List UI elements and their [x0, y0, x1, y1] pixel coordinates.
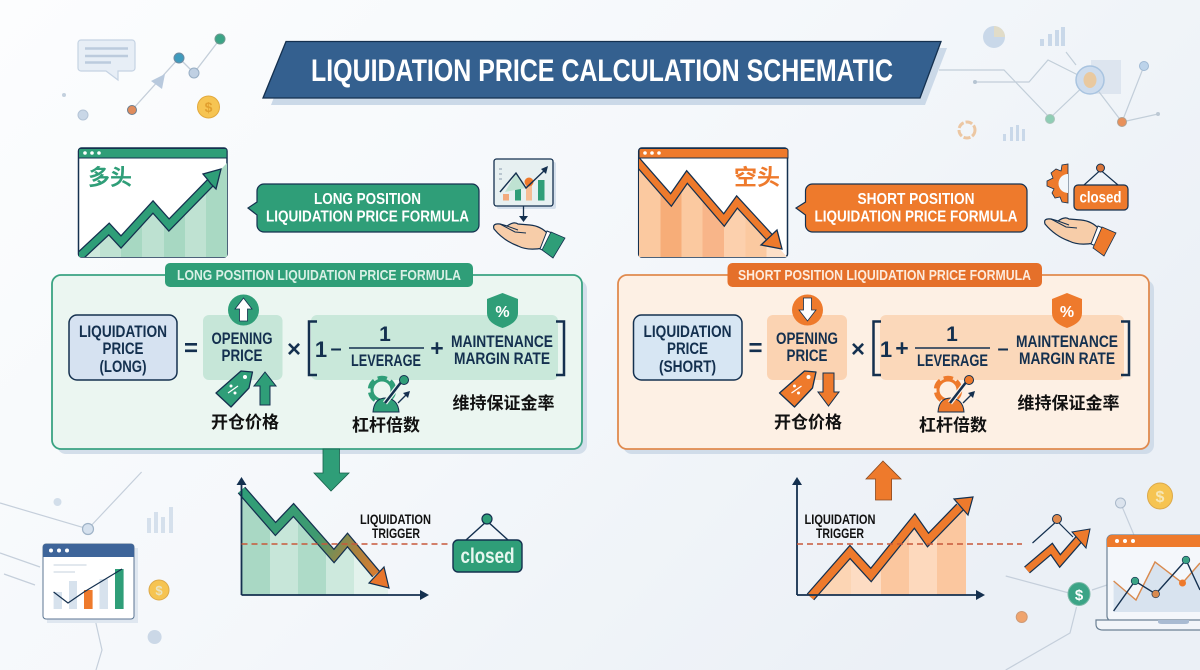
bracket expression: MAINTENANCE [451, 332, 553, 351]
icon: shield percent: % [495, 304, 510, 321]
long callout: LIQUIDATION PRICE FORMULA [266, 208, 469, 226]
title banner [263, 42, 947, 105]
maintenance margin chinese label: 维持保证金率 [1018, 393, 1120, 413]
long chart window [78, 148, 227, 258]
long trigger label: LIQUIDATION [360, 511, 431, 527]
long trigger label: TRIGGER [372, 525, 420, 541]
decoration: bottom-right laptop and network: $ [1075, 587, 1084, 604]
bracket expression: + [430, 335, 444, 361]
bracket expression: 1 [379, 323, 391, 346]
label: long: 多头 [88, 165, 132, 190]
decoration: bottom-left window and network [0, 472, 173, 670]
opening price box [203, 315, 282, 380]
multiply: × [287, 336, 301, 363]
leverage chinese label: 杠杆倍数 [919, 415, 987, 435]
bracket expression: – [997, 338, 1009, 360]
arrow: short panel up [866, 461, 901, 500]
opening price chinese label: 开仓价格 [774, 412, 842, 432]
icon: gear, closed sign and hand: closed [1080, 190, 1122, 206]
bracket expression: MAINTENANCE [1016, 332, 1118, 351]
bracket expression: LEVERAGE [917, 351, 988, 370]
icon: price tag and down arrow [780, 371, 839, 407]
chart: long liquidation trigger [236, 477, 450, 600]
bracket expression: 1 [946, 323, 958, 346]
opening price box: OPENING [776, 329, 838, 348]
opening price box: OPENING [212, 329, 272, 348]
icon: sign and rising arrow [1027, 514, 1090, 570]
panel: short formula [618, 263, 1154, 454]
short trigger label: LIQUIDATION [804, 511, 876, 527]
short chart window [636, 148, 788, 257]
leverage chinese label: 杠杆倍数 [352, 415, 420, 435]
short panel heading [728, 263, 1042, 287]
icon: up arrow circle [228, 294, 259, 326]
bracket expression: MARGIN RATE [454, 349, 550, 368]
arrow: long panel down [314, 449, 349, 491]
bracket expression [309, 315, 564, 380]
long callout: LONG POSITION [314, 191, 421, 208]
liquidation price short box: LIQUIDATION [644, 322, 732, 341]
icon: price tag and up arrow [216, 371, 276, 407]
liquidation price short box: (SHORT) [659, 357, 716, 376]
bracket expression [874, 315, 1129, 380]
liquidation price short box [634, 315, 742, 380]
icon: down arrow circle [792, 294, 823, 326]
sign: closed (long): closed [460, 545, 514, 568]
maintenance margin chinese label: 维持保证金率 [452, 393, 554, 413]
bracket expression: 1 [880, 337, 892, 362]
short callout: LIQUIDATION PRICE FORMULA [814, 208, 1018, 226]
icon: gear, closed sign and hand [1045, 164, 1128, 256]
icon: shield percent [1052, 293, 1082, 328]
short trigger label [804, 511, 876, 541]
panel: long formula [52, 263, 587, 454]
decoration: top-left chat and nodes [62, 34, 225, 120]
liquidation price short box: PRICE [667, 339, 708, 358]
bracket expression: LEVERAGE [351, 351, 421, 370]
label: short: 空头 [734, 165, 780, 190]
bracket expression: + [895, 335, 909, 361]
decoration: top-right network [939, 26, 1160, 141]
long panel heading: LONG POSITION LIQUIDATION PRICE FORMULA [177, 267, 461, 284]
liquidation price long box: LIQUIDATION [79, 322, 167, 341]
short callout: SHORT POSITION [858, 191, 974, 208]
liquidation price long box [69, 315, 177, 380]
opening price box: PRICE [222, 346, 262, 365]
title text: LIQUIDATION PRICE CALCULATION SCHEMATIC [311, 52, 893, 88]
short callout [796, 184, 1027, 232]
opening price box [767, 315, 847, 380]
equals: = [748, 335, 763, 362]
liquidation price long box: (LONG) [100, 357, 146, 376]
bracket expression: MARGIN RATE [1019, 349, 1115, 368]
opening price chinese label: 开仓价格 [211, 412, 279, 432]
bracket expression: 1 [315, 337, 327, 362]
long trigger label [360, 511, 431, 541]
decoration: top-left chat and nodes: $ [205, 99, 213, 115]
decoration: bottom-right laptop and network: $ [1156, 489, 1165, 506]
chart: short liquidation trigger [792, 477, 1022, 600]
long callout [248, 184, 479, 232]
decoration: bottom-right laptop and network [1006, 483, 1200, 670]
short panel heading: SHORT POSITION LIQUIDATION PRICE FORMULA [738, 267, 1031, 284]
equals: = [184, 335, 198, 362]
short trigger label: TRIGGER [816, 525, 864, 541]
decoration: bottom-left window and network: $ [155, 583, 163, 598]
long panel heading [165, 263, 473, 287]
sign: closed (long) [453, 514, 522, 572]
multiply: × [851, 336, 865, 363]
liquidation price long box: PRICE [102, 339, 144, 358]
icon: leverage gear [370, 376, 410, 412]
icon: chart in hand [494, 159, 565, 258]
bracket expression: – [330, 338, 342, 360]
opening price box: PRICE [786, 346, 828, 365]
icon: leverage gear [936, 376, 975, 412]
icon: shield percent [487, 293, 518, 328]
icon: shield percent: % [1060, 304, 1074, 321]
